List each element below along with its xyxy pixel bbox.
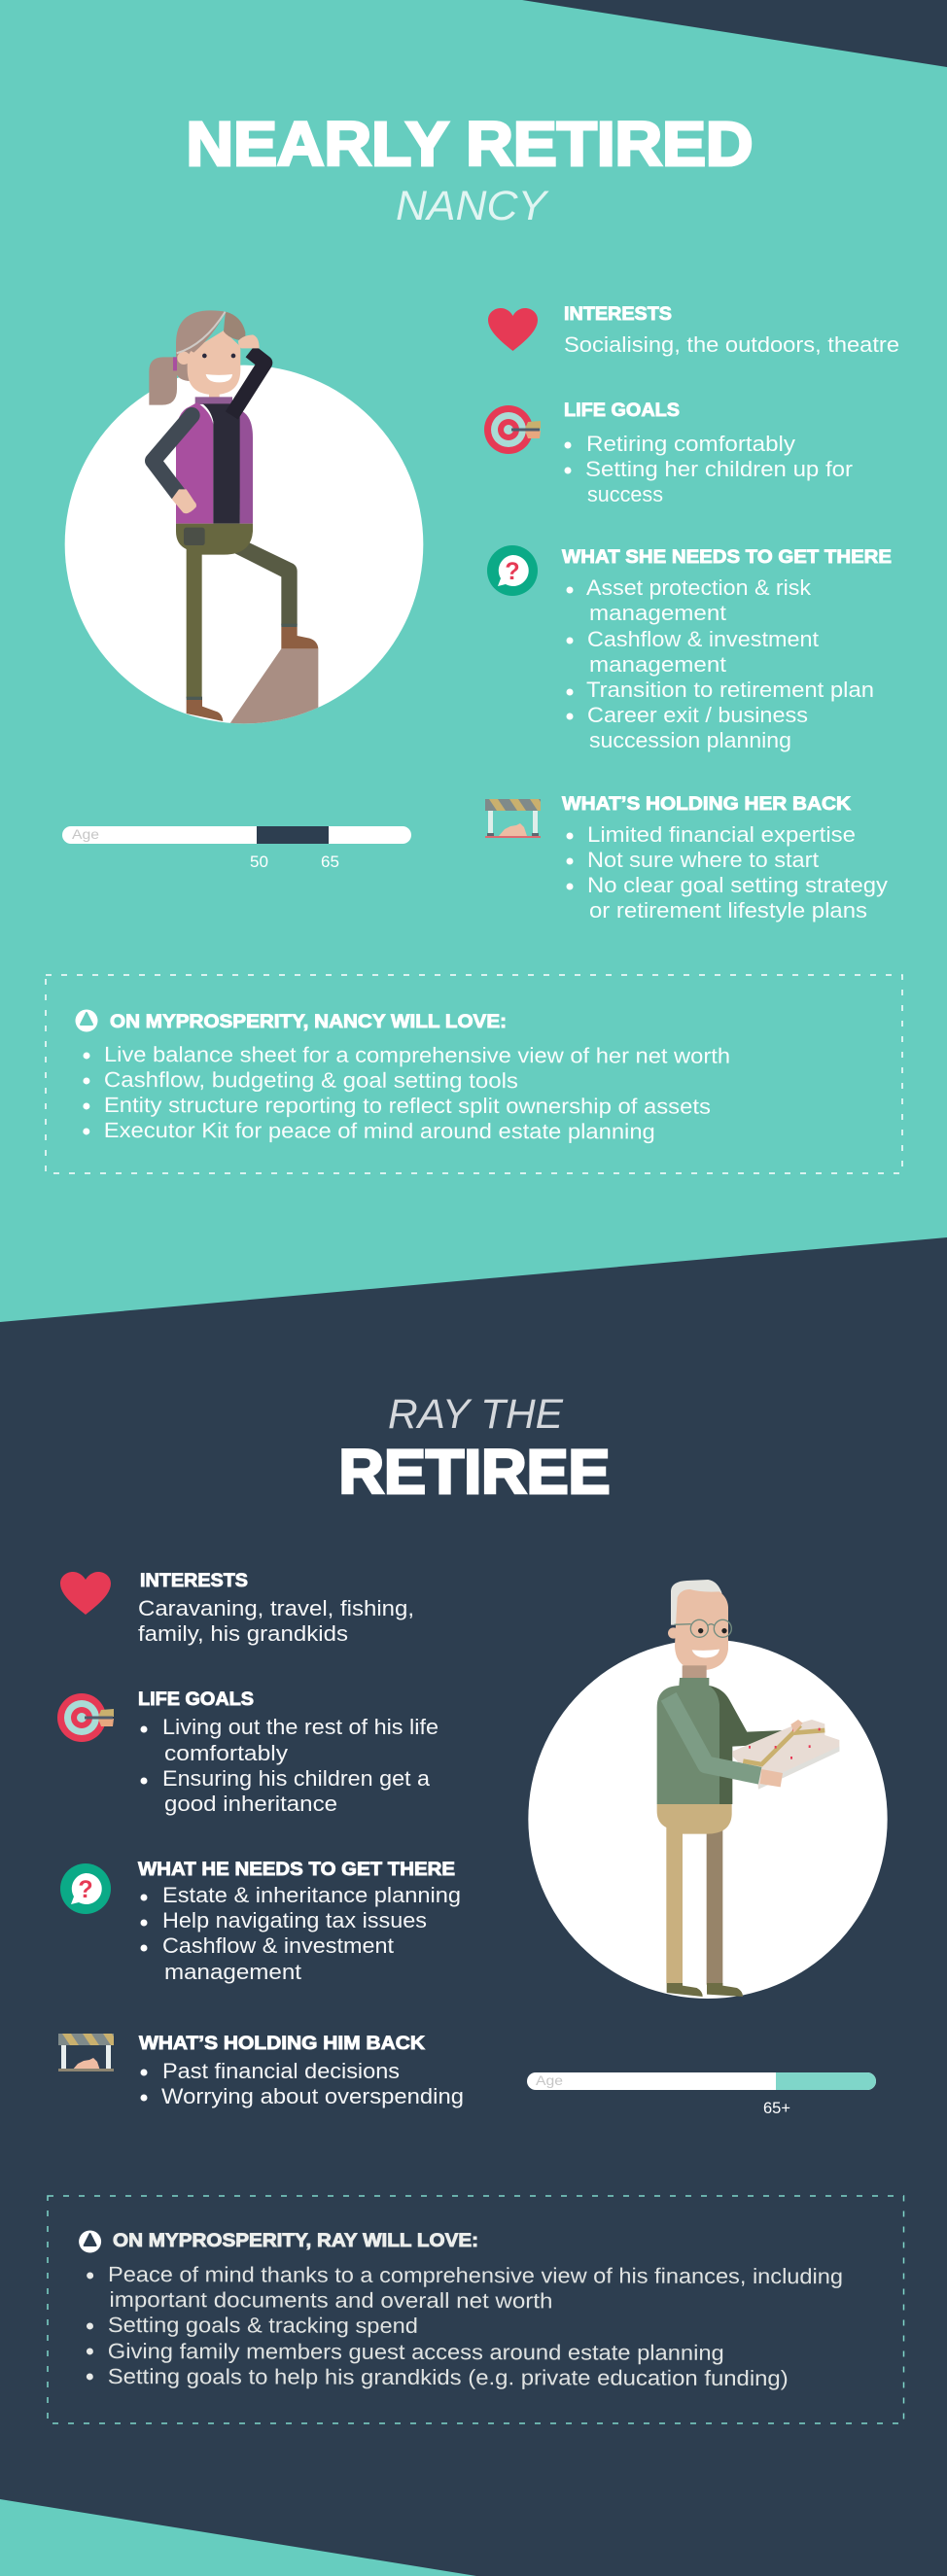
icon: myprosperity logo xyxy=(76,1009,97,1032)
text block: ray interests xyxy=(138,1570,414,1646)
text block: ray holding back: WHAT’S HOLDING HIM BACK xyxy=(139,2033,425,2054)
heading: ray will love: ON MYPROSPERITY, RAY WILL LOVE: xyxy=(113,2230,478,2251)
text block: nancy needs: WHAT SHE NEEDS TO GET THERE xyxy=(562,546,892,568)
text block: nancy life goals: LIFE GOALS xyxy=(564,400,680,421)
text block: ray life goals xyxy=(138,1688,438,1816)
text block: nancy holding back xyxy=(562,793,888,922)
text block: nancy life goals: Retiring comfortably xyxy=(586,432,795,456)
icon: ray heart xyxy=(60,1572,111,1615)
title: nearly retired nancy xyxy=(187,109,753,229)
title: ray the retiree: RETIREE xyxy=(338,1437,611,1507)
title: nearly retired nancy: NEARLY RETIRED xyxy=(187,109,753,179)
text block: ray holding back: Worrying about overspending xyxy=(161,2084,464,2108)
text block: ray needs xyxy=(138,1859,461,1984)
text block: ray life goals: Living out the rest of his life xyxy=(162,1715,438,1739)
title: ray the retiree: RAY THE xyxy=(388,1391,564,1438)
icon: myprosperity logo xyxy=(79,2230,101,2253)
icon: nancy barrier xyxy=(485,799,541,838)
text block: nancy holding back: No clear goal setting strategy xyxy=(587,873,888,897)
chart: nancy age bar xyxy=(62,826,411,871)
chart: ray age bar: 65+ xyxy=(763,2099,790,2117)
text block: ray holding back: Past financial decisions xyxy=(162,2059,400,2083)
callout: nancy on myprosperity xyxy=(46,975,902,1173)
icon: nancy question bubble xyxy=(487,545,538,596)
heading: nancy will love: ON MYPROSPERITY, NANCY WILL LOVE: xyxy=(110,1011,507,1032)
list: nancy benefits xyxy=(83,1042,730,1144)
chart: nancy age bar: 50 xyxy=(250,853,268,871)
icon: nancy heart xyxy=(488,308,538,351)
text block: nancy life goals: success xyxy=(587,482,663,506)
icon: nancy target xyxy=(484,405,541,454)
list: nancy benefits: Executor Kit for peace of mind around estate planning xyxy=(104,1118,655,1143)
text block: nancy holding back: WHAT’S HOLDING HER BACK xyxy=(562,793,851,815)
text block: nancy needs: management xyxy=(589,601,726,625)
icon: ray barrier xyxy=(58,2034,114,2071)
text block: ray needs: Cashflow & investment xyxy=(162,1933,394,1958)
text block: nancy interests xyxy=(564,303,899,357)
text block: nancy needs: Asset protection & risk xyxy=(586,575,812,600)
icon: ray question bubble: ? xyxy=(78,1876,93,1903)
list: ray benefits: Setting goals & tracking spend xyxy=(108,2313,418,2338)
text block: ray needs: management xyxy=(164,1960,301,1984)
list: nancy benefits: Cashflow, budgeting & goal setting tools xyxy=(104,1067,518,1093)
text block: nancy needs: management xyxy=(589,652,726,677)
text block: nancy life goals xyxy=(564,400,853,506)
text block: nancy needs: Cashflow & investment xyxy=(587,627,819,651)
icon: ray target xyxy=(57,1693,114,1742)
text block: nancy needs: Transition to retirement plan xyxy=(586,678,874,702)
title: nearly retired nancy: NANCY xyxy=(396,183,549,229)
text block: nancy needs xyxy=(562,546,892,752)
title: ray the retiree xyxy=(338,1391,611,1507)
text block: ray life goals: Ensuring his children get a xyxy=(162,1766,431,1791)
text block: nancy holding back: or retirement lifestyle plans xyxy=(589,898,867,922)
illustration: ray in white circle xyxy=(528,1580,888,1999)
text block: nancy needs: succession planning xyxy=(589,728,791,752)
text block: ray interests: Caravaning, travel, fishing, xyxy=(138,1596,414,1620)
list: ray benefits: important documents and overall net worth xyxy=(109,2287,552,2313)
text block: ray needs: Estate & inheritance planning xyxy=(162,1883,461,1907)
icon: ray question bubble xyxy=(60,1863,111,1914)
text block: nancy holding back: Not sure where to start xyxy=(587,848,819,872)
chart: ray age bar: Age xyxy=(536,2072,563,2088)
text block: ray holding back xyxy=(139,2033,464,2108)
corner shape: top right navy xyxy=(522,0,947,67)
list: nancy benefits: Live balance sheet for a comprehensive view of her net worth xyxy=(104,1042,730,1068)
text block: nancy holding back: Limited financial expertise xyxy=(587,822,856,847)
chart: ray age bar xyxy=(527,2072,876,2117)
text block: nancy interests: INTERESTS xyxy=(564,303,672,325)
text block: ray life goals: LIFE GOALS xyxy=(138,1688,254,1710)
text block: ray needs: WHAT HE NEEDS TO GET THERE xyxy=(138,1859,455,1880)
text block: ray interests: INTERESTS xyxy=(140,1570,248,1591)
chart: nancy age bar: 65 xyxy=(321,853,339,871)
text block: ray life goals: good inheritance xyxy=(164,1792,337,1816)
list: nancy benefits: Entity structure reporting to reflect split ownership of assets xyxy=(104,1093,711,1119)
text block: ray interests: family, his grandkids xyxy=(138,1621,348,1646)
panel: navy section xyxy=(0,1237,947,2576)
list: ray benefits xyxy=(87,2262,843,2390)
text block: ray life goals: comfortably xyxy=(164,1741,288,1765)
list: ray benefits: Giving family members guest access around estate planning xyxy=(108,2339,724,2365)
text block: nancy interests: Socialising, the outdoors, theatre xyxy=(564,332,899,357)
list: ray benefits: Setting goals to help his grandkids (e.g. private education funding) xyxy=(108,2364,789,2390)
text block: nancy needs: Career exit / business xyxy=(587,703,808,727)
illustration: nancy in white circle xyxy=(65,310,423,736)
icon: nancy question bubble: ? xyxy=(505,558,520,585)
list: ray benefits: Peace of mind thanks to a comprehensive view of his finances, including xyxy=(108,2262,843,2288)
text block: nancy life goals: Setting her children up for xyxy=(585,457,853,481)
chart: nancy age bar: Age xyxy=(72,826,99,842)
text block: ray needs: Help navigating tax issues xyxy=(162,1908,427,1932)
callout: ray on myprosperity xyxy=(48,2196,904,2423)
